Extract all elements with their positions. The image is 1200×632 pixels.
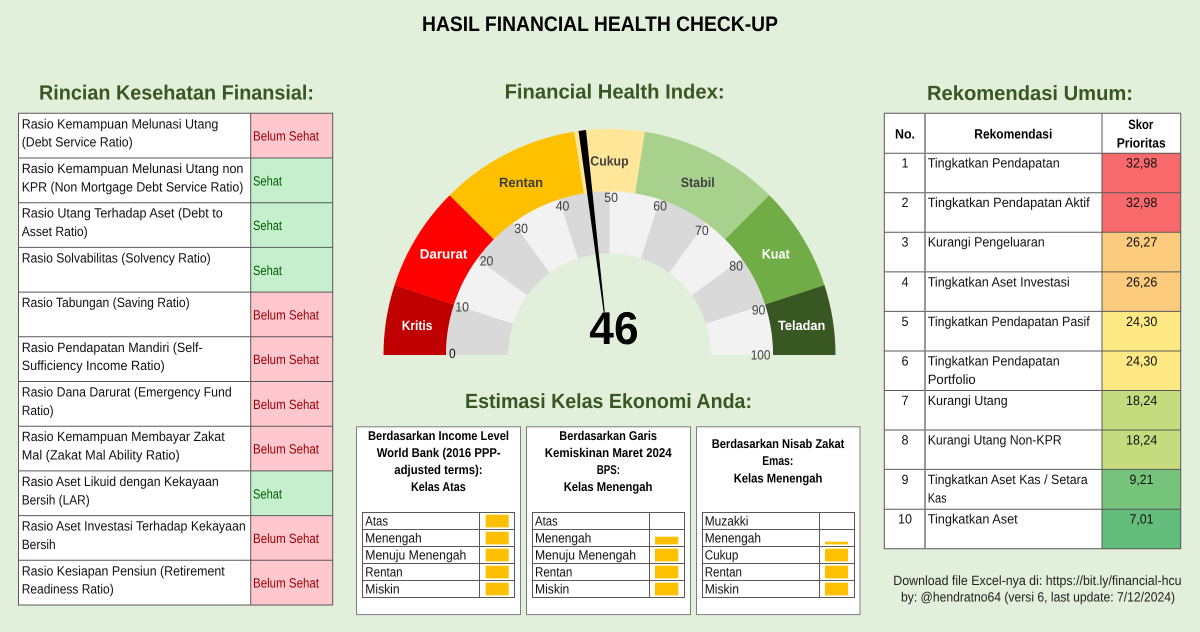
row: self-sufficiency income ratio: Belum Sehat <box>253 352 319 367</box>
row 6: 6 <box>902 353 908 368</box>
row: emergency fund ratio <box>22 382 333 426</box>
row 9 <box>902 469 1181 509</box>
gauge: scale numbers: 70 <box>695 223 709 238</box>
gauge: band labels: Kuat <box>762 247 790 262</box>
row 10 <box>898 509 1181 549</box>
row 3: 26,27 <box>1126 235 1157 250</box>
gauge: band labels: Kritis <box>402 318 432 333</box>
row 8: 8 <box>902 432 908 447</box>
row: debt service ratio: Rasio Kemampuan Melunasi Utang <box>22 116 218 131</box>
row: non mortgage debt service ratio: Rasio Kemampuan Melunasi Utang non <box>22 161 243 176</box>
row 4: Tingkatkan Aset Investasi <box>928 274 1070 289</box>
row 7: 7 <box>902 393 908 408</box>
row: emergency fund ratio: Rasio Dana Darurat (Emergency Fund <box>22 384 232 400</box>
table header: Skor <box>1128 117 1154 132</box>
row 1: 32,98 <box>1126 156 1157 171</box>
bar table: World Bank: Menengah <box>365 530 422 545</box>
row: debt service ratio: (Debt Service Ratio) <box>22 135 133 150</box>
row 1 <box>902 153 1181 193</box>
bar table: BPS: Miskin <box>535 581 569 596</box>
gauge: scale numbers: 60 <box>653 199 667 214</box>
row: zakat mal ability ratio: Belum Sehat <box>253 442 319 457</box>
footer: download credit <box>893 573 1182 605</box>
panel heading: World Bank: adjusted terms): <box>394 462 483 477</box>
gauge: scale numbers <box>449 190 770 362</box>
gauge: scale numbers: 90 <box>752 302 765 317</box>
panel heading: World Bank: Berdasarkan Income Level <box>368 428 509 443</box>
bar table: Nisab Zakat: Muzakki <box>705 513 748 528</box>
row: debt to asset ratio: Asset Ratio) <box>22 224 88 239</box>
row: retirement readiness ratio <box>22 560 333 605</box>
row 10: 7,01 <box>1130 512 1154 527</box>
row: LAR <box>22 471 333 516</box>
row 2: Tingkatkan Pendapatan Aktif <box>928 195 1090 210</box>
panel heading: BPS <box>545 428 672 494</box>
panel: kelas ekonomi World Bank <box>356 427 520 615</box>
row: self-sufficiency income ratio <box>22 337 333 382</box>
bar table: Nisab Zakat: Miskin <box>705 581 739 596</box>
panel heading: BPS: Kelas Menengah <box>564 479 653 494</box>
row 8 <box>902 430 1181 469</box>
heading: Financial Health Index: Financial Health Index: <box>505 80 725 104</box>
bar table: BPS: Atas <box>535 513 558 528</box>
gauge: scale numbers: 30 <box>514 221 528 236</box>
gauge: band labels: Teladan <box>778 318 825 333</box>
row: debt service ratio: Belum Sehat <box>253 129 319 144</box>
gauge: band labels <box>402 153 825 333</box>
row: solvency ratio: Rasio Solvabilitas (Solvency Ratio) <box>22 250 211 265</box>
row: solvency ratio: Sehat <box>253 263 282 278</box>
row: debt service ratio <box>22 113 333 158</box>
gauge: needle <box>578 130 605 312</box>
row 8: 18,24 <box>1126 432 1158 447</box>
row 5: 5 <box>902 314 908 329</box>
bar table: Nisab Zakat: Menengah <box>705 530 761 545</box>
table header: Prioritas <box>1117 135 1166 150</box>
bar table: World Bank: Rentan <box>365 564 403 579</box>
panel: rincian kesehatan finansial table <box>18 113 333 605</box>
row 1: 1 <box>902 156 908 171</box>
table header: Rekomendasi <box>974 126 1052 141</box>
row: saving ratio <box>22 292 333 337</box>
gauge: scale numbers: 0 <box>449 346 456 361</box>
row: solvency ratio <box>22 247 333 292</box>
row: emergency fund ratio: Belum Sehat <box>253 397 319 412</box>
panel heading: BPS: BPS: <box>597 462 620 477</box>
row 3 <box>902 232 1181 272</box>
row 9: Kas <box>928 490 947 505</box>
gauge: scale numbers: 20 <box>480 253 493 268</box>
row: self-sufficiency income ratio: Rasio Pendapatan Mandiri (Self- <box>22 340 203 355</box>
bar table: Nisab Zakat <box>702 512 854 598</box>
row 2: 32,98 <box>1126 195 1157 210</box>
panel: kelas ekonomi BPS <box>526 427 690 615</box>
row: aset investasi <box>22 516 333 560</box>
row 8: Kurangi Utang Non-KPR <box>928 432 1062 447</box>
title: HASIL FINANCIAL HEALTH CHECK-UP <box>422 13 778 36</box>
panel heading: BPS: Kemiskinan Maret 2024 <box>545 445 672 460</box>
row 2: 2 <box>902 195 908 210</box>
bar table: Nisab Zakat: Cukup <box>705 547 738 562</box>
row: non mortgage debt service ratio: Sehat <box>253 173 282 188</box>
row: zakat mal ability ratio: Rasio Kemampuan Membayar Zakat <box>22 429 225 444</box>
row: LAR: Bersih (LAR) <box>22 492 90 507</box>
row 4 <box>902 272 1181 311</box>
row: LAR: Rasio Aset Likuid dengan Kekayaan <box>22 474 219 489</box>
row: debt to asset ratio: Rasio Utang Terhadap Aset (Debt to <box>22 206 223 221</box>
panel heading: Nisab Zakat: Kelas Menengah <box>734 470 823 485</box>
row 2 <box>902 193 1181 232</box>
row: retirement readiness ratio: Rasio Kesiapan Pensiun (Retirement <box>22 563 225 578</box>
row: saving ratio: Rasio Tabungan (Saving Ratio) <box>22 295 190 310</box>
row 6 <box>902 351 1181 390</box>
heading: Rincian Kesehatan Finansial: Rincian Kesehatan Finansial: <box>39 82 314 104</box>
panel heading: Nisab Zakat: Emas: <box>762 453 793 468</box>
chart: financial health index gauge <box>384 129 836 362</box>
bar table: Nisab Zakat: Rentan <box>705 564 742 579</box>
row 7: 18,24 <box>1126 393 1158 408</box>
bar table: BPS: Menuju Menengah <box>535 547 636 562</box>
panel: kelas ekonomi Nisab Zakat <box>696 427 860 615</box>
bar table: World Bank <box>362 512 514 598</box>
bar table: World Bank: Menuju Menengah <box>365 547 466 562</box>
row: debt to asset ratio <box>22 203 333 247</box>
gauge: band labels: Cukup <box>590 153 629 168</box>
gauge: band labels: Darurat <box>420 247 468 262</box>
bar table: BPS <box>532 512 684 598</box>
heading: Rekomendasi Umum: Rekomendasi Umum: <box>927 82 1133 105</box>
row: retirement readiness ratio: Belum Sehat <box>253 576 319 591</box>
row: saving ratio: Belum Sehat <box>253 308 319 322</box>
bar table: World Bank: Miskin <box>365 581 400 596</box>
gauge: scale numbers: 100 <box>751 347 770 362</box>
gauge: scale numbers: 40 <box>556 199 569 214</box>
row: zakat mal ability ratio: Mal (Zakat Mal Ability Ratio) <box>22 448 180 463</box>
gauge: scale numbers: 80 <box>729 259 743 274</box>
row: aset investasi: Belum Sehat <box>253 531 319 546</box>
panel: rekomendasi umum table <box>884 113 1181 549</box>
row 10: 10 <box>898 512 912 527</box>
table header: No. <box>895 126 915 141</box>
row: aset investasi: Bersih <box>22 537 56 552</box>
row: debt to asset ratio: Sehat <box>253 218 282 233</box>
row 4: 4 <box>902 274 909 289</box>
row: zakat mal ability ratio <box>22 426 333 471</box>
row 5: 24,30 <box>1126 314 1157 329</box>
bar table: BPS: Menengah <box>535 530 591 545</box>
bar table: BPS: Rentan <box>535 564 572 579</box>
gauge: index value: 46 <box>589 302 639 354</box>
row 9: 9 <box>902 472 908 487</box>
gauge: inner scale ring <box>446 192 773 355</box>
gauge: scale numbers: 50 <box>604 190 618 205</box>
gauge: band labels: Rentan <box>499 175 543 190</box>
row: non mortgage debt service ratio: KPR (Non Mortgage Debt Service Ratio) <box>22 179 243 194</box>
row 6: Tingkatkan Pendapatan <box>928 353 1060 368</box>
row: emergency fund ratio: Ratio) <box>22 403 54 418</box>
panel heading: BPS: Berdasarkan Garis <box>559 428 657 443</box>
row 1: Tingkatkan Pendapatan <box>928 156 1060 171</box>
panel heading: Nisab Zakat <box>712 436 845 485</box>
row 5: Tingkatkan Pendapatan Pasif <box>928 314 1090 329</box>
row: retirement readiness ratio: Readiness Ratio) <box>22 582 114 597</box>
panel heading: World Bank: World Bank (2016 PPP- <box>377 445 501 460</box>
row 4: 26,26 <box>1126 274 1157 289</box>
gauge: outer colored bands <box>384 129 836 355</box>
row 7 <box>902 390 1181 430</box>
panel heading: Nisab Zakat: Berdasarkan Nisab Zakat <box>712 436 845 451</box>
footer: download credit: by: @hendratno64 (versi 6, last update: 7/12/2024) <box>901 590 1175 605</box>
row: aset investasi: Rasio Aset Investasi Terhadap Kekayaan <box>22 519 246 534</box>
row: non mortgage debt service ratio <box>22 158 333 203</box>
row 3: 3 <box>902 235 908 250</box>
panel heading: World Bank: Kelas Atas <box>411 479 466 494</box>
row 10: Tingkatkan Aset <box>928 512 1018 527</box>
row 6: 24,30 <box>1126 353 1157 368</box>
footer: download credit: Download file Excel-nya di: https://bit.ly/financial-hcu <box>893 573 1182 588</box>
gauge: scale numbers: 10 <box>455 299 469 314</box>
row 9: Tingkatkan Aset Kas / Setara <box>928 472 1088 487</box>
row: self-sufficiency income ratio: Sufficiency Income Ratio) <box>22 358 165 373</box>
table header <box>895 117 1166 150</box>
row 6: Portfolio <box>928 372 976 387</box>
row 7: Kurangi Utang <box>928 393 1008 408</box>
row 5 <box>902 311 1181 351</box>
row: LAR: Sehat <box>253 486 282 501</box>
bar table: World Bank: Atas <box>365 513 388 528</box>
heading: Estimasi Kelas Ekonomi: Estimasi Kelas Ekonomi Anda: <box>465 390 752 413</box>
gauge: band labels: Stabil <box>681 175 715 190</box>
panel heading: World Bank <box>368 428 509 494</box>
row 9: 9,21 <box>1130 472 1154 487</box>
row 3: Kurangi Pengeluaran <box>928 235 1045 250</box>
